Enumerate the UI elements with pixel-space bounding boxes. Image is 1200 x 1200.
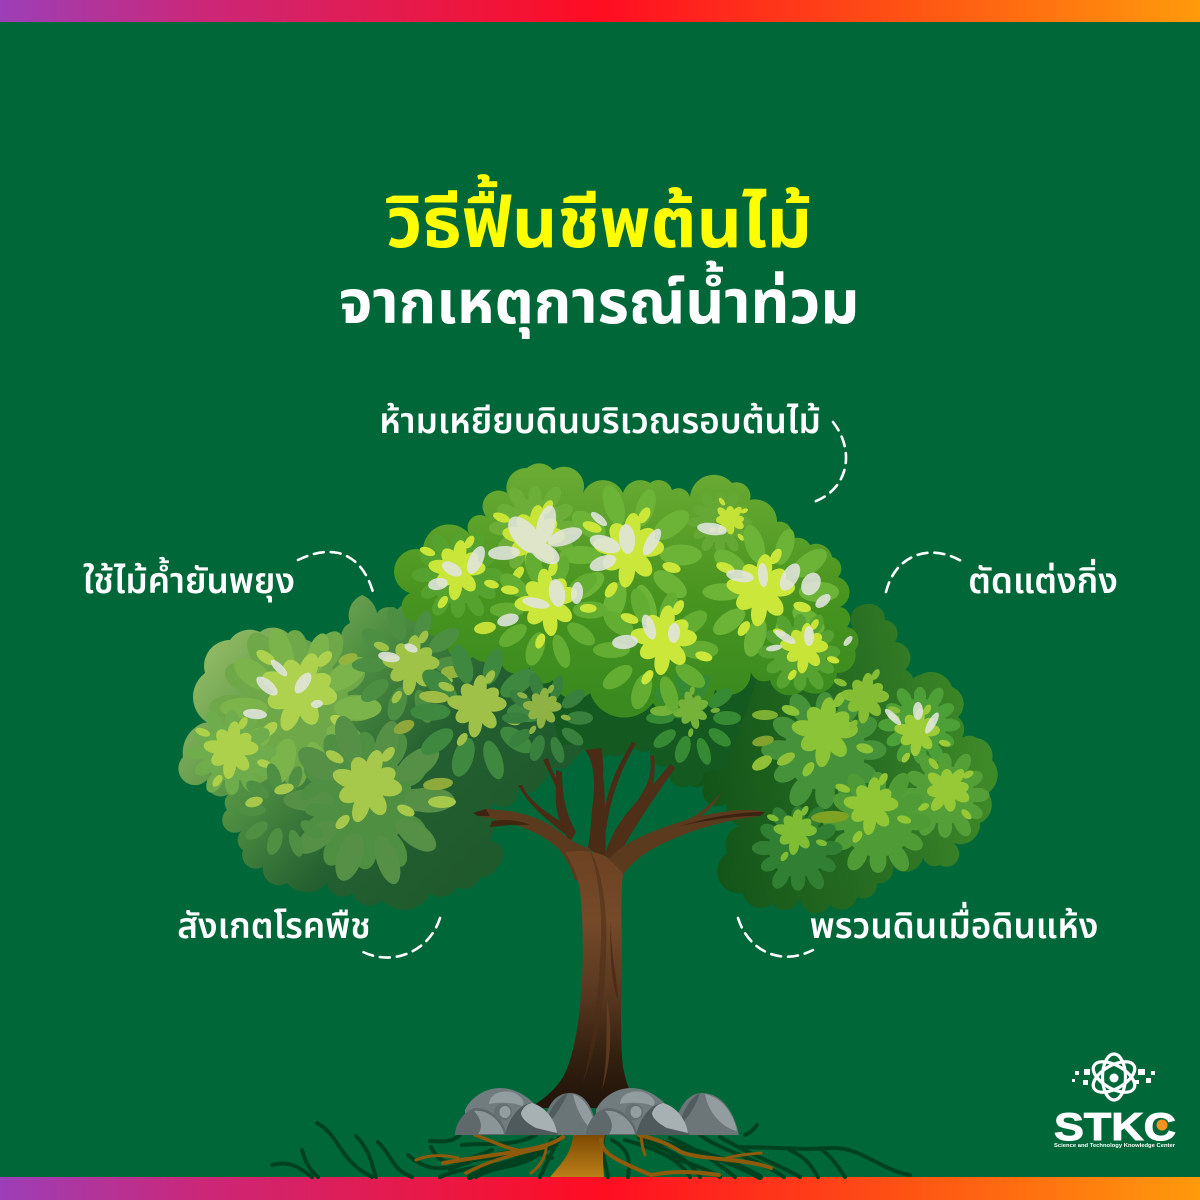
foliage tuft: right bbox=[702, 522, 839, 662]
logo tagline: Science and Technology Knowledge Center bbox=[1054, 1143, 1176, 1149]
dashed connector: bottom left label bbox=[363, 918, 440, 958]
tree trunk and branches bbox=[473, 742, 765, 1108]
dashed connector: top label bbox=[811, 422, 846, 503]
label: do not step on soil: ห้ามเหยียบดินบริเวณรอบต้นไม้ bbox=[379, 402, 821, 441]
dashed connector: bottom right label bbox=[738, 918, 813, 957]
branch: right main bbox=[606, 791, 765, 880]
label: watch for disease: สังเกตโรคพืช bbox=[177, 907, 371, 946]
foliage tuft: bottom left bbox=[238, 713, 456, 887]
logo orange dot bbox=[1156, 1120, 1168, 1130]
foliage tuft: far right bbox=[899, 747, 994, 839]
dashed connector: left label bbox=[298, 552, 373, 592]
foliage tuft: upper left bbox=[209, 625, 382, 790]
foliage tuft: lower right bbox=[823, 769, 931, 875]
white highlight leaves bbox=[243, 503, 941, 735]
canopy silhouette: dark middle band bbox=[540, 670, 760, 787]
foliage tuft: upper middle bbox=[337, 605, 470, 725]
label: water when dry: พรวนดินเมื่อดินแห้ง bbox=[810, 901, 1098, 946]
foliage tuft: center left bbox=[391, 642, 547, 782]
foliage tuft: left bbox=[412, 531, 503, 619]
rocks bbox=[455, 1088, 739, 1135]
logo pixel squares bbox=[1072, 1069, 1155, 1085]
rock centre bbox=[543, 1093, 597, 1135]
label: prune branches: ตัดแต่งกิ่ง bbox=[968, 558, 1118, 601]
branch: right up bbox=[605, 755, 675, 862]
root base bbox=[416, 1135, 771, 1177]
logo atom icon bbox=[1088, 1054, 1140, 1100]
trunk bbox=[530, 851, 640, 1108]
label: use stakes: ใช้ไม้ค้ำยันพยุง bbox=[83, 556, 295, 602]
foliage tuft: upper right bbox=[833, 668, 960, 765]
foliage tuft: top right bbox=[687, 490, 761, 554]
foliage tuft: center right bbox=[749, 689, 886, 811]
top gradient bar bbox=[0, 0, 1200, 22]
foliage tuft: lower center bbox=[593, 586, 718, 714]
foliage tuft: small inner bbox=[646, 669, 741, 766]
rock far right bbox=[673, 1093, 739, 1135]
bottom gradient bar bbox=[0, 1177, 1200, 1200]
canopy: main top silhouette bbox=[394, 463, 858, 718]
logo: STKC bbox=[1054, 1054, 1176, 1149]
foliage: left cluster tufts bbox=[186, 605, 593, 887]
branch: left main bbox=[473, 809, 596, 880]
branch: left small up bbox=[518, 785, 574, 838]
title: subheading: จากเหตุการณ์น้ำท่วม bbox=[339, 260, 859, 339]
foliage tuft: far left bbox=[186, 708, 277, 796]
foliage tuft: lower left center bbox=[473, 550, 608, 670]
foliage tuft: bottom right bbox=[752, 804, 849, 892]
rock group left bbox=[455, 1088, 558, 1135]
branch: centre bbox=[585, 748, 606, 860]
foliage tuft: lower right bbox=[758, 612, 840, 692]
canopy silhouette: lower left bbox=[178, 595, 590, 910]
title: main heading: วิธีฟื้นชีพต้นไม้ bbox=[386, 174, 812, 262]
foliage: right cluster tufts bbox=[646, 668, 994, 892]
dashed connector: right label bbox=[886, 553, 963, 592]
canopy silhouette: lower right bbox=[669, 604, 998, 913]
foliage tuft: center top bbox=[560, 482, 702, 628]
roots bbox=[272, 1123, 910, 1177]
logo wordmark: STKC bbox=[1054, 1106, 1176, 1149]
foliage: main top tufts bbox=[243, 482, 941, 735]
foliage tuft: inner bbox=[502, 671, 593, 765]
foliage tuft: top left bbox=[489, 484, 581, 582]
rock group right bbox=[586, 1088, 689, 1135]
